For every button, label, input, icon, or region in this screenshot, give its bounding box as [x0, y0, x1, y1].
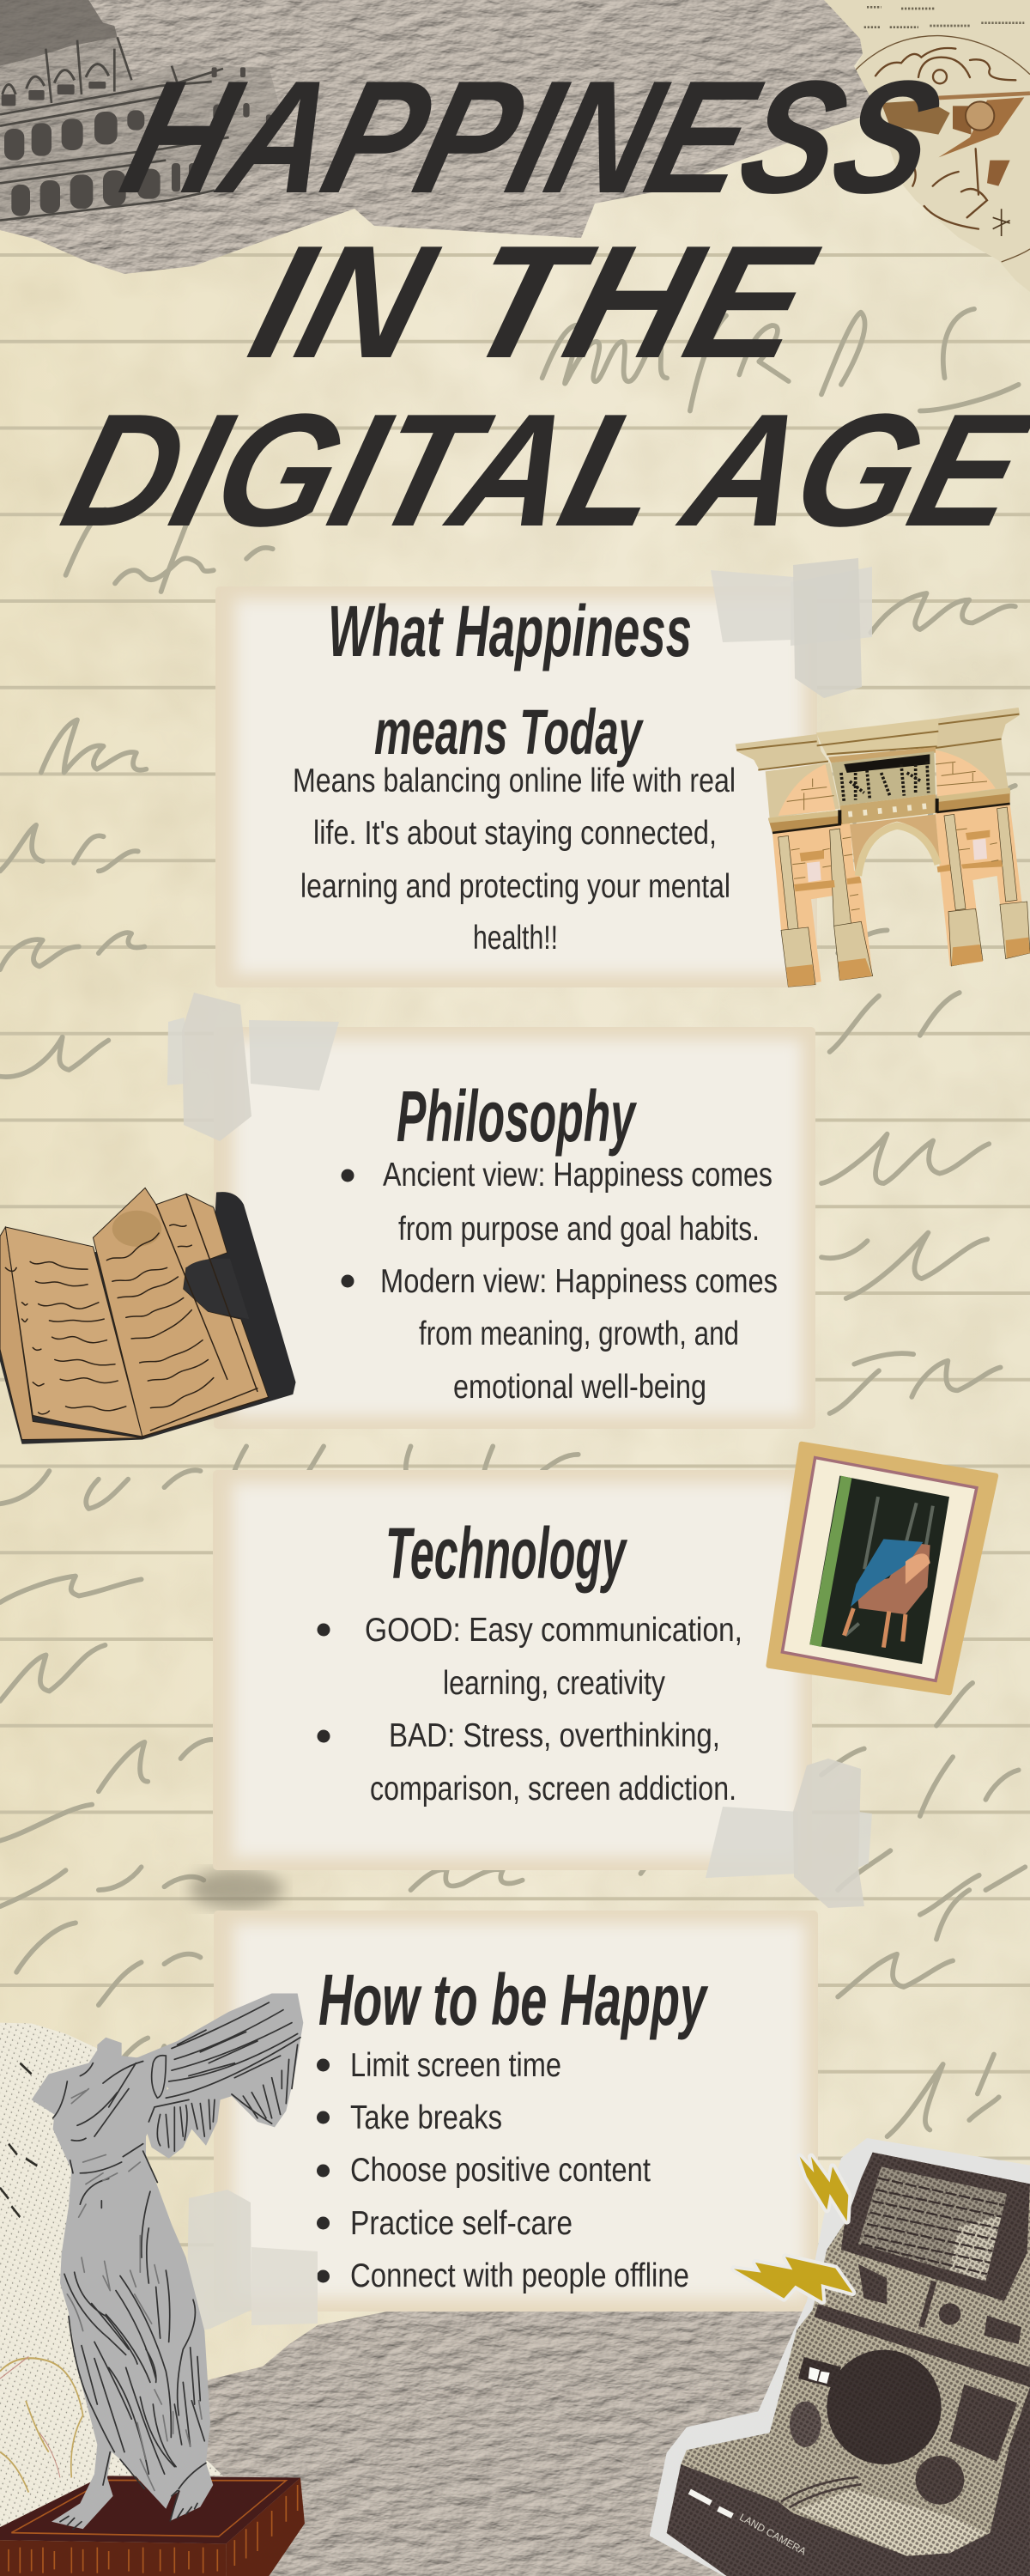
title: [47, 48, 1030, 560]
bullets: good and bad: BAD: Stress, overthinking,: [389, 1717, 720, 1754]
tape: card four: [186, 2190, 318, 2333]
body text: health!!: [473, 920, 558, 957]
title: IN THE: [234, 213, 832, 392]
bullets: ancient and modern view: emotional well-being: [453, 1369, 706, 1406]
tape: card two: [167, 993, 339, 1141]
torn grey paper bottom: [154, 2312, 1030, 2576]
camera body: [667, 2153, 1030, 2576]
panel: technology: [213, 1470, 812, 1870]
panel: what happiness means today: [215, 586, 817, 987]
bullets: good and bad: learning, creativity: [443, 1665, 665, 1702]
icon: roman arch: [736, 708, 1030, 987]
bullets: ancient and modern view: from purpose and goal habits.: [398, 1211, 760, 1248]
camera label: LAND CAMERA: [737, 2511, 809, 2558]
wing: [137, 1993, 303, 2159]
halftone dots: [667, 2153, 1030, 2576]
icon: winged victory statue: [0, 1993, 305, 2576]
bullets: good and bad: [318, 1612, 742, 1807]
top right sketch paper with ornament: [824, 0, 1030, 292]
lightning bolts: [734, 2157, 852, 2301]
icon: instant camera with lightning: [650, 2138, 1030, 2576]
bullet list: Practice self-care: [350, 2205, 573, 2242]
panel: how to be happy: [214, 1911, 818, 2312]
dark smudge on background: [189, 1868, 283, 1910]
body text: life. It's about staying connected,: [313, 815, 717, 852]
bullet list: Take breaks: [350, 2099, 502, 2136]
heading: technology: Technology: [385, 1513, 628, 1594]
bullet list: Choose positive content: [350, 2152, 651, 2189]
tape: card three: [706, 1759, 872, 1908]
lens: [827, 2350, 942, 2464]
icon: open book: [0, 1188, 296, 1444]
heading: what happiness: What Happiness: [328, 591, 692, 671]
body text: learning and protecting your mental: [300, 868, 730, 905]
pedestal: [0, 2476, 305, 2576]
tape: card one: [711, 558, 872, 698]
icon: framed painting: [768, 1444, 996, 1692]
colosseum engraving: [0, 0, 283, 221]
map scrap behind statue: [0, 2023, 223, 2527]
bullet list: Connect with people offline: [350, 2257, 689, 2294]
bullets: ancient and modern view: Ancient view: Happiness comes: [383, 1157, 772, 1194]
heading: means today: means Today: [374, 696, 645, 768]
bullets: good and bad: comparison, screen addiction.: [370, 1771, 736, 1807]
bullets: ancient and modern view: from meaning, growth, and: [419, 1315, 739, 1352]
figure: [32, 2038, 213, 2529]
bullets: ancient and modern view: [342, 1157, 778, 1406]
heading: how to be happy: How to be Happy: [318, 1959, 709, 2040]
bullets: ancient and modern view: Modern view: Happiness comes: [380, 1263, 778, 1300]
flash bar: [841, 2153, 1030, 2301]
heading: philosophy: Philosophy: [397, 1076, 638, 1157]
bullet list: [317, 2047, 689, 2294]
bullet list: Limit screen time: [350, 2047, 561, 2084]
torn grey paper top: [0, 0, 878, 274]
panel: philosophy: [214, 1027, 815, 1429]
bullets: good and bad: GOOD: Easy communication,: [365, 1612, 742, 1649]
sticker outline: [650, 2138, 1030, 2576]
body text: [293, 762, 736, 957]
background handwriting: [0, 309, 1025, 2136]
body text: Means balancing online life with real: [293, 762, 736, 799]
